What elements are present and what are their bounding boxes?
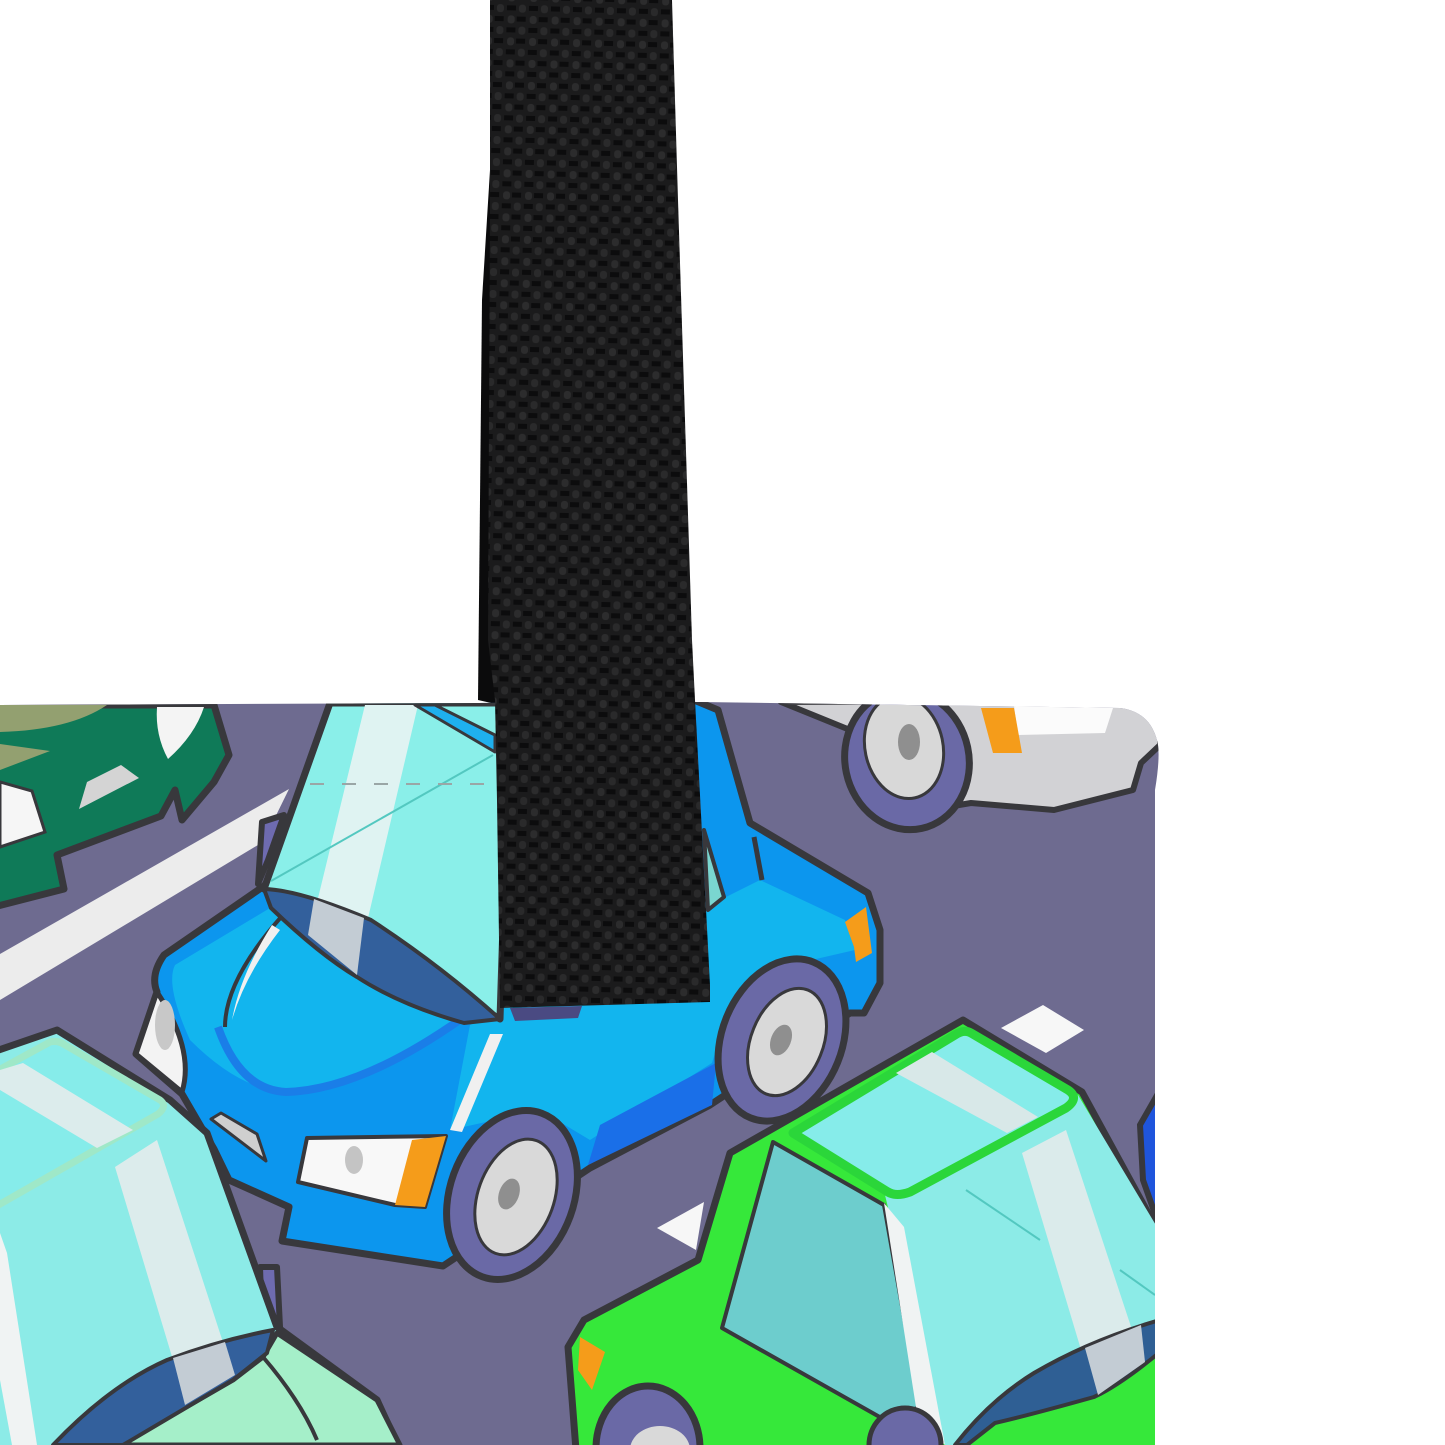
blue car orange indicator bbox=[395, 1136, 446, 1207]
white car wheel tyre bbox=[841, 704, 973, 834]
blue car front hub bbox=[460, 1128, 572, 1266]
blue car fog lamp bbox=[211, 1113, 266, 1161]
mint car bbox=[0, 1030, 400, 1445]
black strap bbox=[488, 0, 710, 1021]
white car body bbox=[781, 700, 1160, 815]
blue car door line bbox=[754, 837, 762, 880]
road dash left bbox=[657, 1202, 704, 1250]
blue car windshield stitch line bbox=[310, 783, 495, 785]
blue car hood highlight bbox=[172, 905, 461, 1092]
mint car base glare bbox=[173, 1342, 235, 1405]
tote bag fabric bbox=[0, 679, 1165, 1445]
blue car side highlight bbox=[450, 880, 855, 1140]
blue car hood glare bbox=[232, 925, 280, 1020]
blue car hood line bbox=[225, 916, 282, 1027]
dark green car body bbox=[0, 705, 229, 908]
green car indicator bbox=[578, 1337, 605, 1390]
blue car windshield glare bbox=[318, 705, 418, 917]
blue car lower shade bbox=[588, 1063, 716, 1165]
green car base glare bbox=[1085, 1325, 1145, 1395]
olive windshield bbox=[0, 705, 107, 732]
blue car door glare bbox=[450, 1034, 503, 1132]
blue car base glare bbox=[308, 899, 364, 975]
road stripe bbox=[0, 789, 289, 1000]
bright green car bbox=[568, 1020, 1160, 1445]
blue car headlight bbox=[298, 1136, 446, 1207]
mint car windshield base bbox=[53, 1330, 273, 1445]
green car pillar glare bbox=[884, 1203, 945, 1445]
mint car small mirror bbox=[260, 1267, 280, 1327]
back strap layer bbox=[478, 170, 500, 705]
green car headlight bbox=[0, 782, 45, 847]
green car cabin fold line bbox=[966, 1190, 1155, 1295]
olive lower glass bbox=[0, 744, 50, 770]
green car body bbox=[568, 1020, 1160, 1445]
mint car body bbox=[0, 1030, 400, 1445]
blue car rear wheel tyre bbox=[695, 940, 869, 1140]
mint car cabin glare bbox=[115, 1140, 233, 1407]
strap upper length bbox=[488, 0, 710, 1008]
mint car roof glass bbox=[0, 1041, 164, 1207]
blue car front hub centre bbox=[494, 1176, 524, 1212]
green car windshield base bbox=[955, 1320, 1160, 1445]
green car side window bbox=[722, 1142, 920, 1420]
white car upper panel bbox=[1014, 706, 1113, 735]
mint car hood bbox=[120, 1333, 400, 1445]
blue car windshield fold line bbox=[271, 755, 493, 881]
road dash right bbox=[1001, 1005, 1084, 1053]
blue car side lamp bbox=[136, 992, 185, 1092]
green car wheel tyre bbox=[596, 1386, 700, 1445]
mint car hood line bbox=[263, 1357, 317, 1440]
green car roof glare bbox=[896, 1052, 1038, 1133]
blue car rear hub bbox=[733, 977, 841, 1107]
green car hub bbox=[630, 1426, 690, 1445]
blue car tail indicator bbox=[845, 907, 872, 962]
strap shadow on bag bbox=[510, 1006, 582, 1021]
blue car side lamp dot bbox=[155, 1000, 175, 1050]
blue car hood arc bbox=[218, 1019, 461, 1092]
green car mirror bbox=[869, 1408, 941, 1445]
green car windshield glare bbox=[1022, 1130, 1141, 1393]
white car hub bbox=[862, 704, 946, 800]
blue car bbox=[136, 700, 880, 1298]
blue car windshield bbox=[264, 703, 510, 1019]
white car top right bbox=[778, 703, 1158, 834]
green car roof glass bbox=[793, 1031, 1074, 1194]
blue car headlight dots bbox=[345, 1146, 363, 1174]
green car lamp bbox=[157, 707, 204, 759]
mint car pillar glare bbox=[0, 1233, 37, 1445]
blue car side window bbox=[704, 830, 724, 910]
white car hub centre bbox=[898, 724, 920, 760]
white car orange light bbox=[981, 708, 1022, 753]
green car fog lamp bbox=[79, 765, 139, 809]
blue car windshield base bbox=[264, 889, 500, 1023]
dark green car bbox=[0, 705, 229, 908]
blue car rear hub centre bbox=[766, 1021, 796, 1059]
green car cabin bbox=[885, 1095, 1160, 1445]
neighbour car edge at right bbox=[1140, 1090, 1160, 1228]
mint car roof glare bbox=[0, 1063, 133, 1148]
blue car body bbox=[136, 700, 880, 1266]
blue car small mirror bbox=[258, 815, 284, 884]
blue car front wheel tyre bbox=[424, 1092, 600, 1298]
blue car roof trim bbox=[415, 705, 495, 752]
